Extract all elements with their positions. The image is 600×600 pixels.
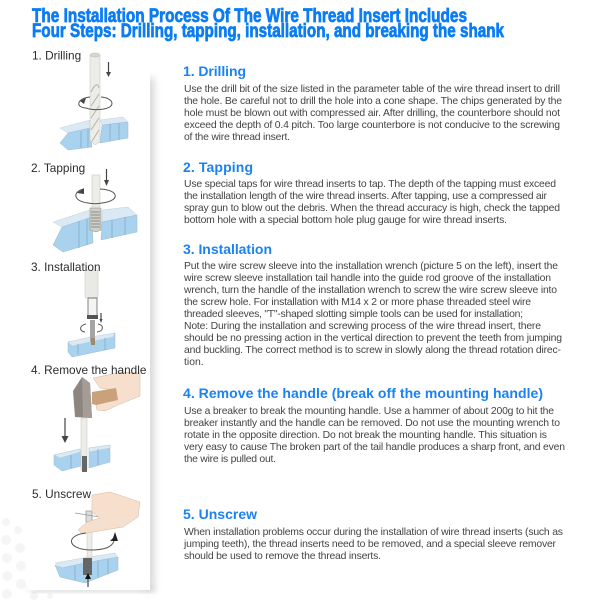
text block: remove the handle description: very easy to cause The broken part of the tail handle produces a sharp front, and even	[184, 442, 565, 453]
section 4: remove the handle: 4. Remove the handle (break off the mounting handle)	[183, 385, 543, 401]
text block: drilling description	[184, 84, 562, 143]
section 1: drilling	[183, 63, 562, 143]
text block: installation description: and buckling. The correct method is to screw in slowly along the thread rotation direc-	[184, 345, 561, 356]
section 1: drilling: 1. Drilling	[183, 63, 246, 79]
step 3 illustration: installation	[31, 260, 115, 357]
text block: remove the handle description: Use a breaker to break the mounting handle. Use a hammer of about 200g to hit the	[184, 406, 554, 417]
step 4 illustration: remove the handle: 4. Remove the handle	[31, 363, 147, 377]
section 3: installation: 3. Installation	[183, 241, 272, 257]
step 1 illustration: drilling	[32, 48, 128, 150]
text block: drilling description: of the wire thread insert.	[184, 132, 290, 143]
step 2 illustration: tapping	[31, 161, 137, 252]
title	[32, 6, 504, 42]
section 4: remove the handle	[183, 385, 565, 465]
step 2 illustration: tapping: 2. Tapping	[31, 161, 85, 175]
text block: tapping description: bottom hole with a special bottom hole plug gauge for wire thread inserts.	[184, 215, 507, 226]
step 3 illustration: installation: 3. Installation	[31, 260, 101, 274]
text block: installation description: Put the wire screw sleeve into the installation wrench (picture 5 on the left), insert the	[184, 261, 558, 272]
section 2: tapping: 2. Tapping	[183, 159, 253, 175]
text block: drilling description: Use the drill bit of the size listed in the parameter table of the wire thread insert to drill	[184, 84, 560, 95]
step 4 illustration: remove the handle	[31, 363, 147, 472]
step 1 illustration: drilling: 1. Drilling	[32, 48, 81, 62]
panel: illustration card	[28, 50, 154, 592]
text block: remove the handle description: breaker instantly and the handle can be removed. Do not use the mounting wrench to	[184, 418, 560, 429]
text block: installation description: tion.	[184, 357, 204, 368]
text block: tapping description: spray gun to blow out the debris. When the thread accuracy is high, check the tapped	[184, 203, 560, 214]
text block: installation description: threaded sleeves, "T"-shaped slotting simple tools can be used for installation;	[184, 309, 523, 320]
text block: tapping description	[184, 179, 560, 226]
section 2: tapping	[183, 159, 560, 226]
text block: remove the handle description	[184, 406, 565, 465]
section 5: unscrew: 5. Unscrew	[183, 506, 257, 522]
text block: installation description: should be no pressing action in the vertical direction to prevent the teeth from jumping	[184, 333, 562, 344]
text block: unscrew description: When installation problems occur during the installation of wire thread inserts (such as	[184, 527, 563, 538]
text block: installation description	[183, 261, 562, 368]
text block: remove the handle description: the wire is pulled out.	[184, 454, 276, 465]
title: The Installation Process Of The Wire Thread Insert Includes	[32, 6, 467, 27]
text block: installation description: wire screw sleeve installation tail handle into the guide rod groove of the installation	[183, 273, 551, 284]
text block: drilling description: hole must be blown out with compressed air. After drilling, the counterbore should not	[184, 108, 560, 119]
text block: unscrew description	[183, 527, 563, 562]
text block: installation description: Note: During the installation and screwing process of the wire thread insert, there	[184, 321, 541, 332]
text block: remove the handle description: rotate in the opposite direction. Do not break the mounting handle. This situation is	[184, 430, 547, 441]
section 5: unscrew	[183, 506, 563, 562]
text block: installation description: the screw hole. For installation with M14 x 2 or more phase threaded steel wire	[184, 297, 531, 308]
text block: drilling description: exceed the depth of 0.4 pitch. Too large counterbore is not conducive to the screwing	[184, 120, 560, 131]
text block: unscrew description: jumping teeth), the thread inserts need to be removed, and a special sleeve remover	[183, 539, 557, 550]
step 5 illustration: unscrew	[32, 487, 140, 587]
text block: tapping description: Use special taps for wire thread inserts to tap. The depth of the tapping must exceed	[184, 179, 556, 190]
text block: unscrew description: should be used to remove the thread inserts.	[184, 551, 381, 562]
text block: drilling description: the hole. Be careful not to drill the hole into a cone shape. The chips generated by the	[184, 96, 562, 107]
section 3: installation	[183, 241, 562, 368]
step 5 illustration: unscrew: 5. Unscrew	[32, 487, 91, 501]
text block: installation description: wrench, turn the handle of the installation wrench to screw the wire screw sleeve into	[183, 285, 557, 296]
text block: tapping description: the installation length of the wire thread inserts. After tapping, use a compressed air	[184, 191, 548, 202]
